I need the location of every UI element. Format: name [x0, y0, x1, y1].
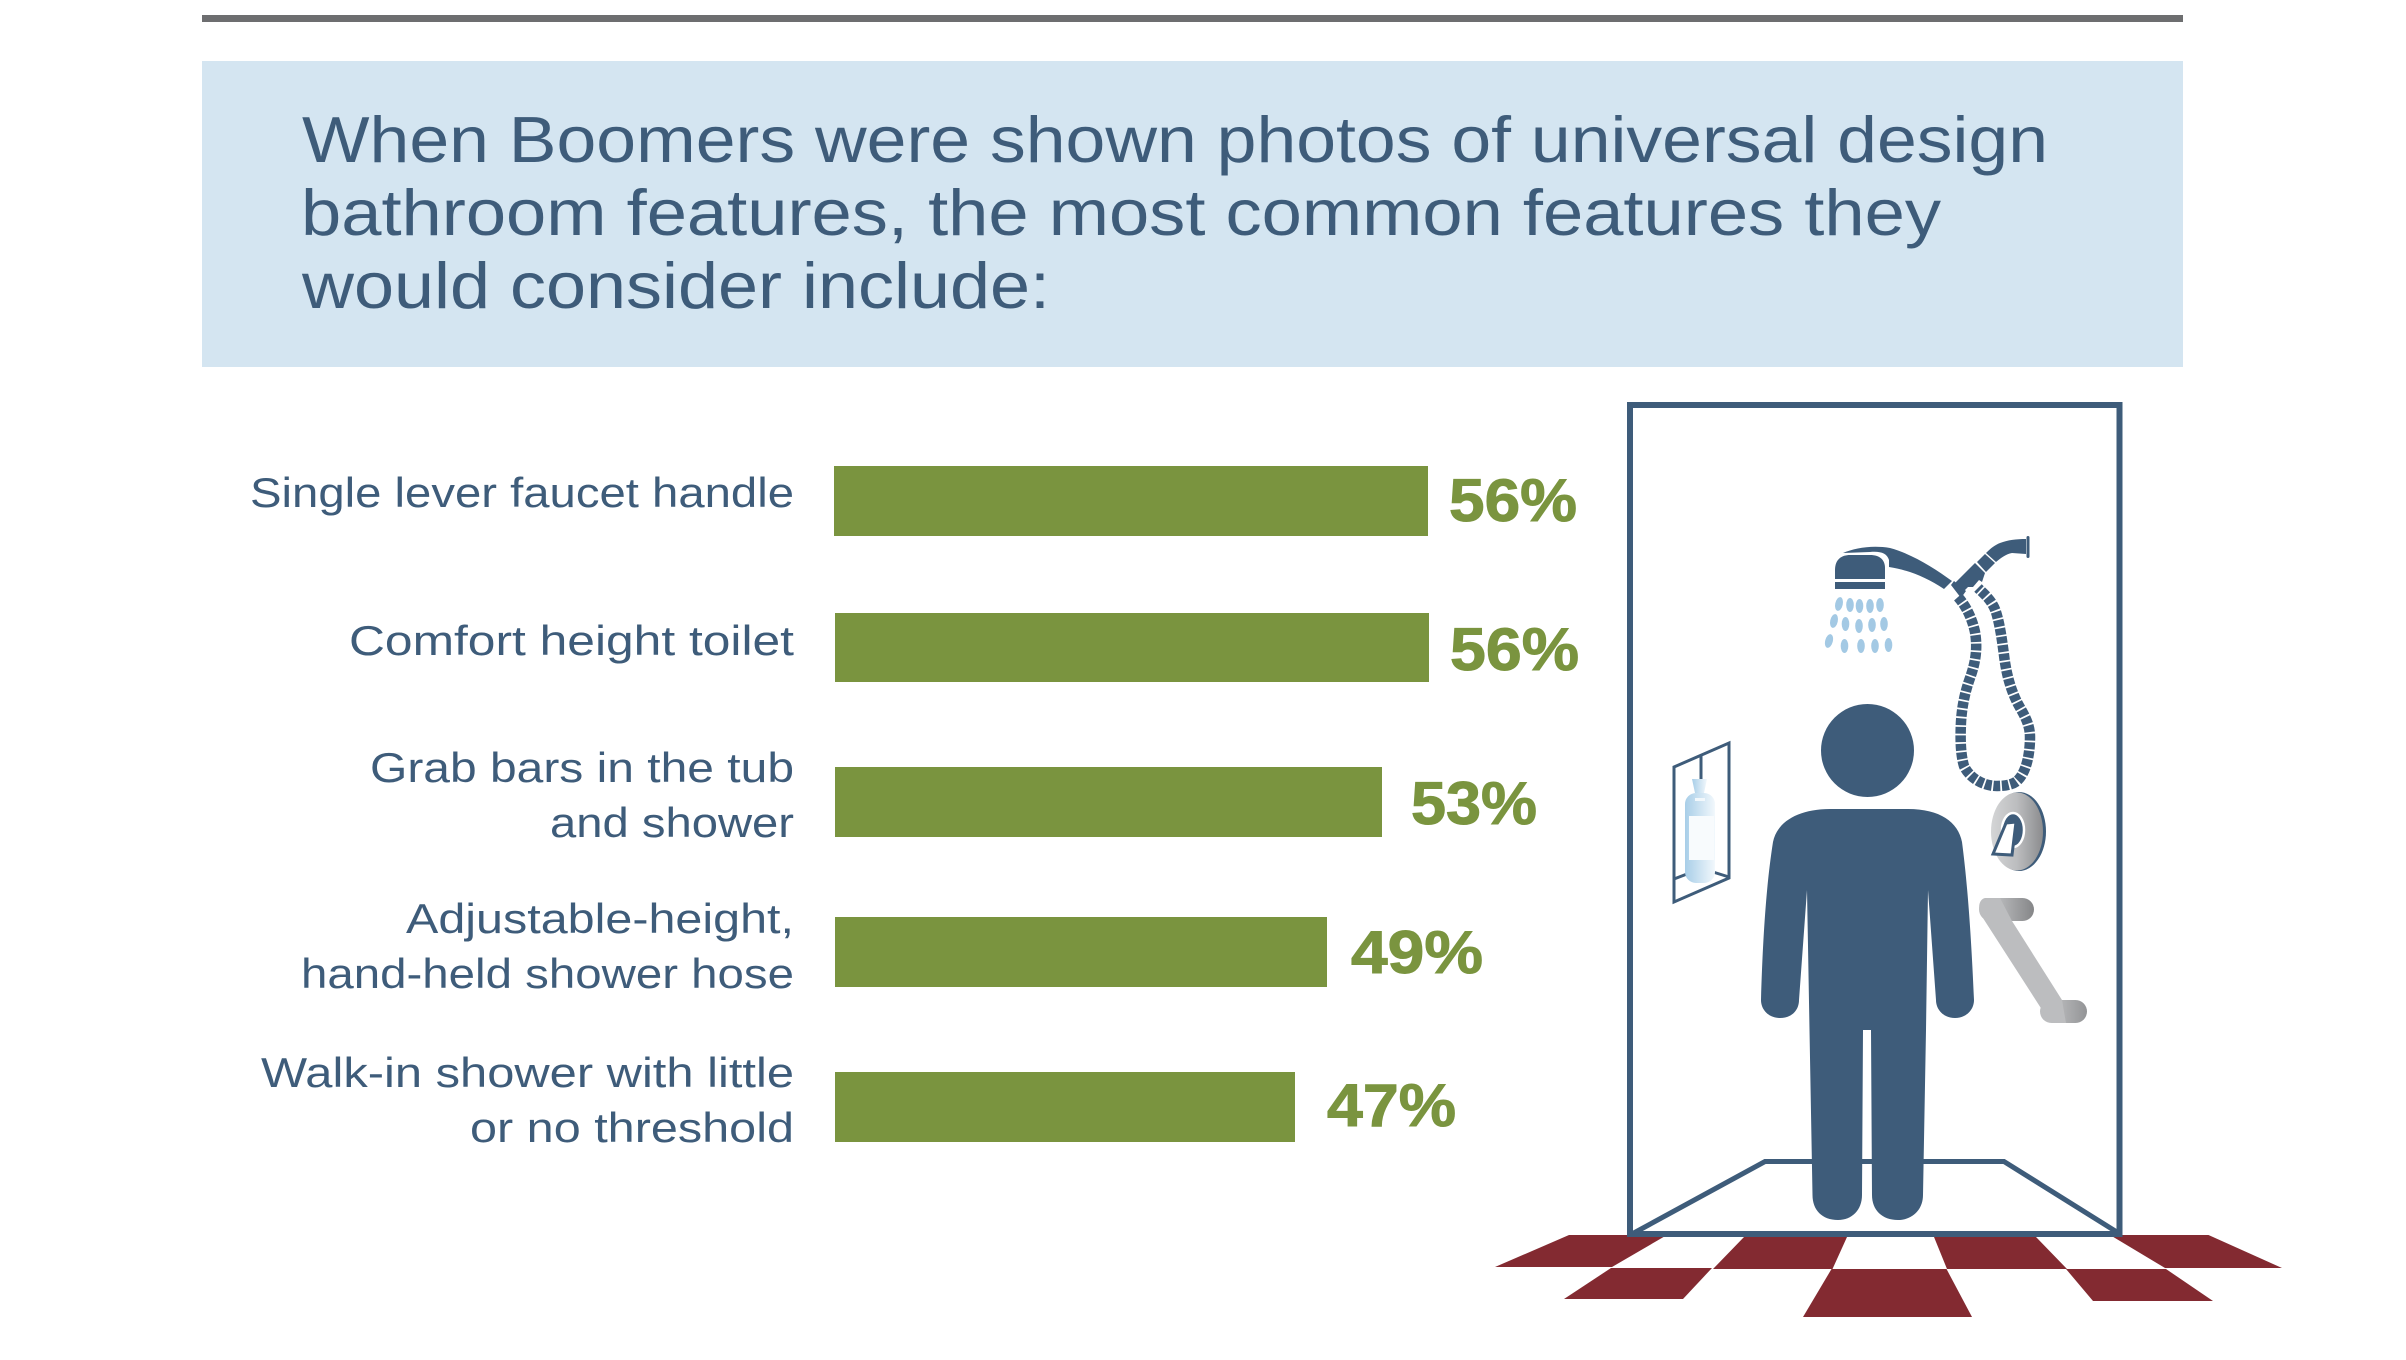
illustration: walk-in shower	[1495, 405, 2282, 1317]
row: adjustable-height shower hose: hand-held shower hose	[301, 950, 794, 997]
icon: hand-held shower head and hose	[1835, 536, 2030, 786]
heading text: When Boomers were shown photos of universal design	[302, 103, 2048, 176]
row: grab bars	[370, 744, 1537, 846]
row: single lever faucet handle: 56%	[1449, 467, 1577, 534]
row: comfort height toilet	[349, 613, 1579, 683]
icon: lever faucet	[1991, 792, 2046, 871]
floor tiles	[1495, 1235, 2282, 1317]
row: walk-in shower: or no threshold	[470, 1104, 794, 1151]
bar chart: bathroom features	[250, 466, 1579, 1151]
icon: water drops	[1824, 596, 1892, 653]
row: grab bars: 53%	[1411, 770, 1537, 837]
row: walk-in shower	[261, 1049, 1456, 1151]
row: adjustable-height shower hose: Adjustable-height,	[406, 895, 794, 942]
row: grab bars: Grab bars in the tub	[370, 744, 794, 791]
row: single lever faucet handle	[250, 466, 1577, 536]
row: adjustable-height shower hose: 49%	[1351, 919, 1483, 986]
heading text: bathroom features, the most common features they	[301, 176, 1942, 249]
heading text	[301, 103, 2048, 322]
row: adjustable-height shower hose	[301, 895, 1483, 997]
row: single lever faucet handle: Single lever faucet handle	[250, 469, 794, 516]
row: grab bars: and shower	[550, 799, 794, 846]
row: walk-in shower: 47%	[1327, 1072, 1456, 1139]
heading text: would consider include:	[301, 249, 1050, 322]
top rule	[202, 15, 2183, 22]
row: comfort height toilet: Comfort height toilet	[349, 617, 794, 664]
shower frame	[1630, 405, 2120, 1234]
row: walk-in shower: Walk-in shower with little	[261, 1049, 794, 1096]
panel: heading banner	[202, 61, 2183, 367]
row: comfort height toilet: 56%	[1450, 616, 1579, 683]
icon: person	[1761, 704, 1974, 1220]
threshold	[1632, 1162, 2120, 1234]
icon: shelf with bottle	[1674, 743, 1729, 902]
icon: grab bar	[1979, 898, 2087, 1023]
